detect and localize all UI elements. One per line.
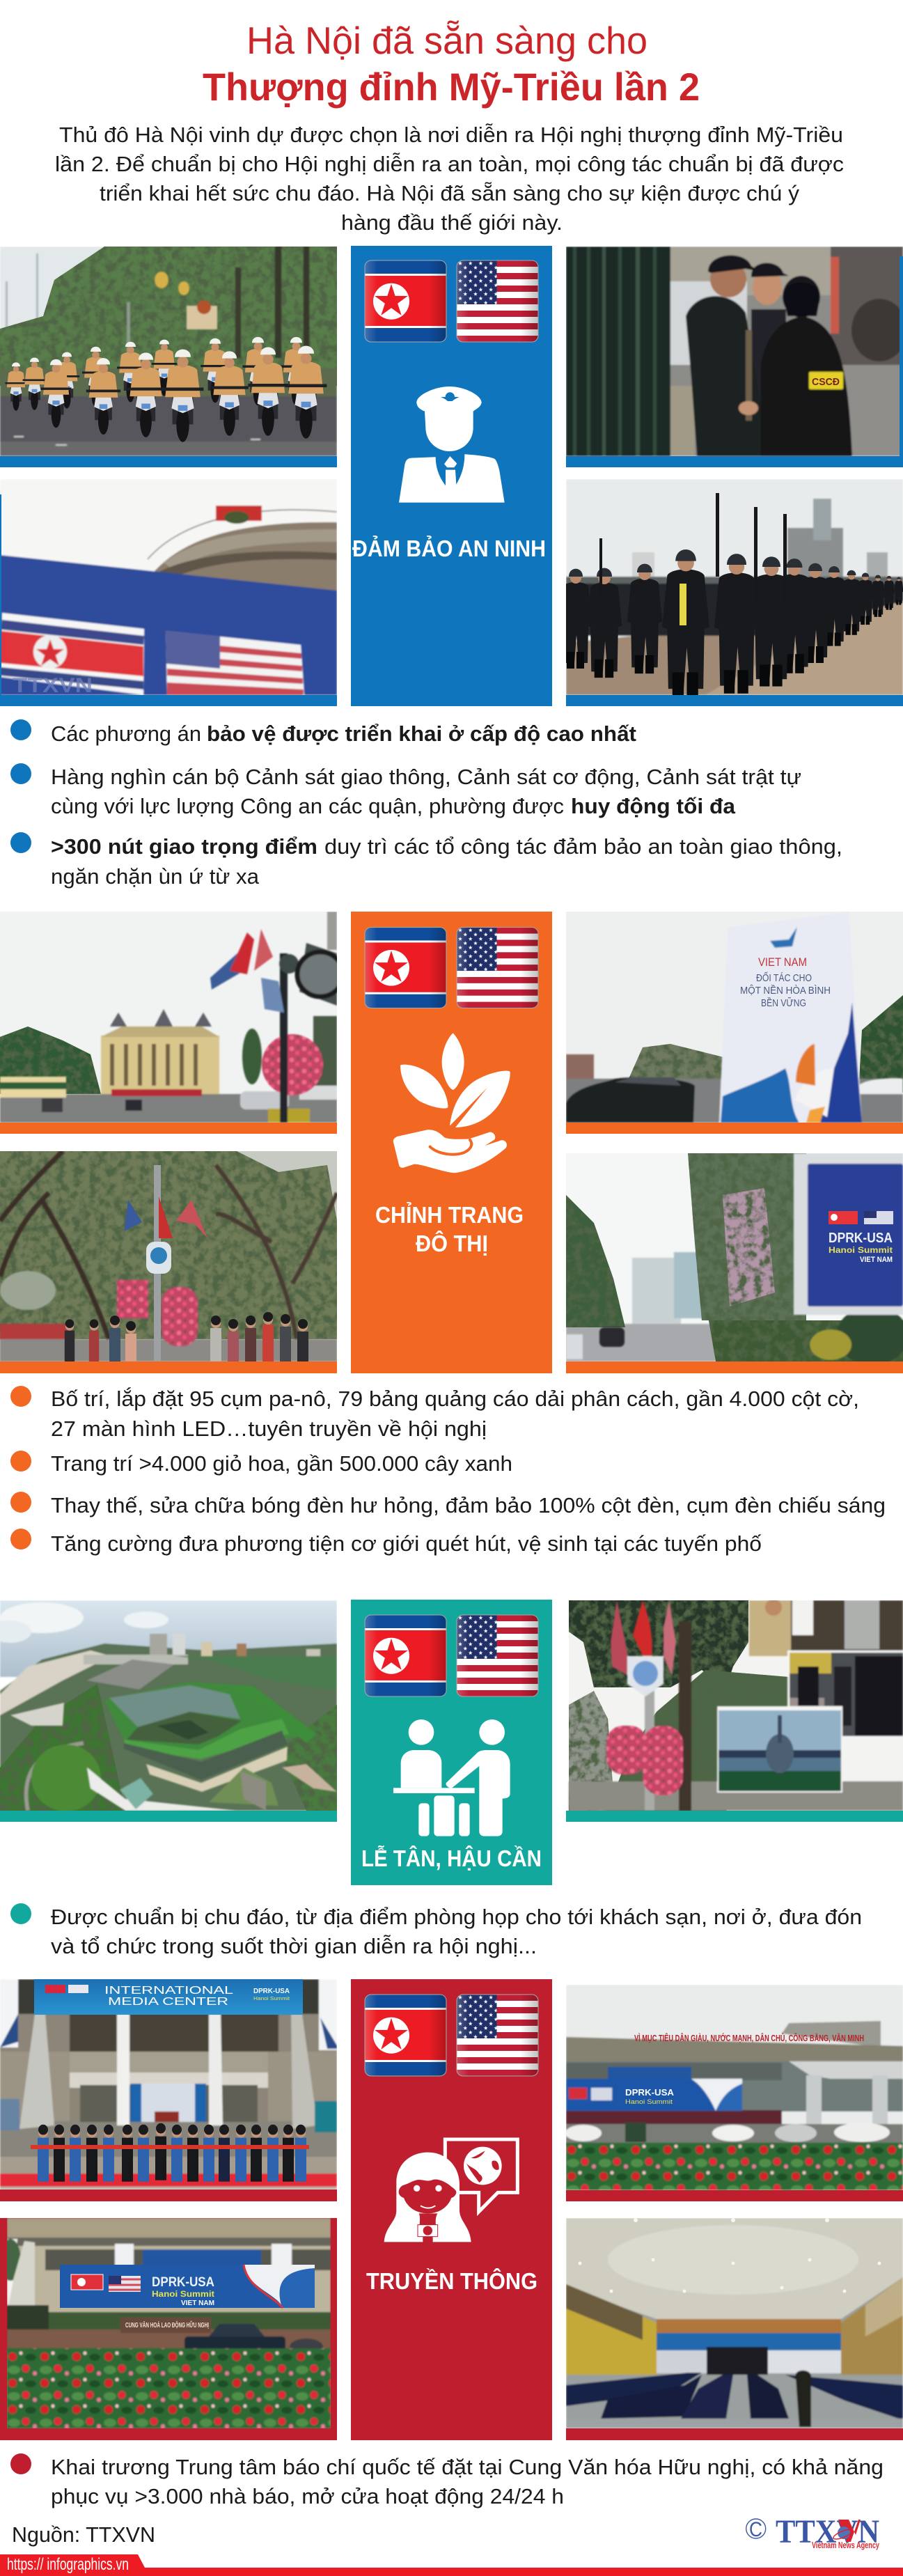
label: urban: [375, 1202, 524, 1256]
title: Hà Nội đã sẵn sàng cho: [246, 19, 647, 62]
bullet list: security: [10, 719, 842, 889]
photo: partnership sign: [566, 912, 903, 1134]
photo: ribbon cutting: Hanoi Summit: [253, 1997, 290, 2001]
photo: banner and flower bed: DPRK-USA: [152, 2275, 214, 2290]
bullet: security 2: Hàng nghìn cán bộ Cảnh sát giao thông, Cảnh sát cơ động, Cảnh sát trật tự: [51, 765, 801, 789]
bullet: security 2: huy động tối đa: [571, 794, 736, 818]
photo: partnership sign: MỘT NỀN HÒA BÌNH: [740, 985, 831, 997]
photo: banner and flower bed: [0, 2218, 337, 2440]
flag: United States: [457, 1995, 538, 2076]
bullet: urban 1: [10, 1386, 859, 1441]
photo: banner and flower bed: CUNG VĂN HOÁ LAO ĐỘNG HỮU NGHỊ: [125, 2320, 209, 2329]
panel: reception and logistics: [0, 1599, 903, 1885]
label: urban: ĐÔ THỊ: [416, 1230, 488, 1256]
photo: partnership sign: ĐỐI TÁC CHO: [756, 971, 812, 984]
intro text block: lần 2. Để chuẩn bị cho Hội nghị diễn ra an toàn, mọi công tác chuẩn bị đã được: [55, 152, 844, 176]
photo: flags on hoarding: [0, 479, 337, 706]
bullet list: media: [10, 2453, 884, 2508]
panel: security: [0, 246, 903, 706]
bullet: security 2: cùng với lực lượng Công an các quận, phường được: [51, 794, 564, 818]
photo: press hall interior: [566, 2218, 903, 2440]
photo: street with billboard: VIET NAM: [860, 1256, 893, 1264]
photo: Friendship Palace exterior: [565, 1985, 903, 2201]
photo: motorcade: [0, 247, 337, 467]
bullet: security 1: Các phương án: [51, 721, 201, 746]
footer bar: [0, 2554, 903, 2576]
centre column: media: [351, 1979, 552, 2440]
icon: hand with plant: [393, 1033, 510, 1173]
bullet: security 3: >300 nút giao trọng điểm: [51, 834, 317, 859]
photo: collage flags, press, aircraft: [566, 1599, 903, 1822]
photo: flags on hoarding: TTXVN: [13, 674, 93, 697]
photo: ribbon cutting: DPRK-USA: [253, 1988, 290, 1995]
bullet: urban 1: Bố trí, lắp đặt 95 cụm pa-nô, 79 bảng quảng cáo dải phân cách, gần 4.000 cột cờ,: [51, 1387, 859, 1411]
bullet: security 2: [10, 763, 801, 818]
bullet: security 1: [10, 719, 636, 746]
bullet: media 1: [10, 2453, 884, 2508]
icon: police officer: [399, 387, 505, 503]
bullet: security 3: duy trì các tổ công tác đảm bảo an toàn giao thông,: [324, 834, 842, 859]
photo: park with flags: [0, 1151, 337, 1375]
bullet list: logistics: [10, 1903, 862, 1958]
centre column: logistics: [351, 1600, 552, 1885]
photo: street with billboard: Hanoi Summit: [829, 1245, 893, 1255]
panel: urban beautification: [0, 912, 903, 1375]
photo: banner and flower bed: Hanoi Summit: [152, 2289, 214, 2299]
photo: ribbon cutting: INTERNATIONAL: [104, 1985, 233, 1997]
bullet: security 3: ngăn chặn ùn ứ từ xa: [51, 864, 260, 889]
intro text block: hàng đầu thế giới này.: [341, 210, 563, 235]
photo: partnership sign: BỀN VỮNG: [761, 997, 806, 1009]
centre column: urban: [351, 912, 552, 1373]
photo: street with billboard: DPRK-USA: [829, 1231, 893, 1246]
photo: convention centre aerial: [0, 1600, 337, 1822]
icon: reporter: [384, 2139, 517, 2242]
panel: media: [0, 1979, 903, 2440]
bullet: urban 4: Tăng cường đưa phương tiện cơ giới quét hút, vệ sinh tại các tuyến phố: [51, 1531, 762, 1556]
footer bar: https:// infographics.vn: [7, 2555, 129, 2574]
bullet: media 1: Khai trương Trung tâm báo chí quốc tế đặt tại Cung Văn hóa Hữu nghị, có khả năng: [51, 2455, 884, 2479]
photo: ribbon cutting: [0, 1979, 337, 2201]
photo: opera house: [0, 912, 343, 1134]
logo: TTXVN: TTXVN: [776, 2513, 879, 2550]
bullet: security 3: [10, 832, 842, 889]
photo: Friendship Palace exterior: Hanoi Summit: [625, 2098, 673, 2105]
title: [203, 19, 700, 109]
flag: North Korea: [365, 1995, 446, 2076]
icon: reception desk: [393, 1719, 510, 1836]
intro text block: Thủ đô Hà Nội vinh dự được chọn là nơi diễn ra Hội nghị thượng đỉnh Mỹ-Triều: [59, 123, 843, 147]
bullet: urban 2: Trang trí >4.000 giỏ hoa, gần 500.000 cây xanh: [51, 1451, 512, 1476]
label: urban: CHỈNH TRANG: [375, 1202, 524, 1228]
bullet list: urban: [10, 1386, 886, 1556]
flag: North Korea: [365, 1615, 446, 1696]
intro text block: triển khai hết sức chu đáo. Hà Nội đã sẵn sàng cho sự kiện được chú ý: [100, 181, 800, 205]
photo: riot police officers: CSCĐ: [812, 376, 840, 388]
photo: street with billboard: [566, 1153, 903, 1373]
bullet: media 1: phục vụ >3.000 nhà báo, mở cửa hoạt động 24/24 h: [51, 2484, 564, 2508]
flag: United States: [457, 1615, 538, 1696]
bullet: logistics 1: Được chuẩn bị chu đáo, từ địa điểm phòng họp cho tới khách sạn, nơi ở, đưa đón: [51, 1905, 862, 1929]
bullet: logistics 1: và tổ chức trong suốt thời gian diễn ra hội nghị...: [51, 1934, 537, 1958]
bullet: security 1: bảo vệ được triển khai ở cấp độ cao nhất: [207, 721, 636, 746]
label: security: ĐẢM BẢO AN NINH: [352, 536, 546, 561]
photo: riot police officers: [566, 247, 903, 467]
logo: TTXVN: C: [749, 2518, 762, 2541]
label: logistics: LỄ TÂN, HẬU CẦN: [361, 1845, 542, 1871]
photo: police line: [560, 479, 903, 706]
photo: partnership sign: VIET NAM: [758, 955, 807, 969]
photo: banner and flower bed: VIET NAM: [181, 2300, 214, 2307]
title: Thượng đỉnh Mỹ-Triều lần 2: [203, 65, 700, 109]
flag: North Korea: [365, 260, 446, 342]
bullet: urban 3: Thay thế, sửa chữa bóng đèn hư hỏng, đảm bảo 100% cột đèn, cụm đèn chiếu sáng: [51, 1493, 886, 1517]
photo: Friendship Palace exterior: DPRK-USA: [625, 2087, 675, 2098]
flag: North Korea: [365, 928, 446, 1008]
centre column: security: [351, 246, 552, 706]
bullet: logistics 1: [10, 1903, 862, 1958]
bullet: urban 1: 27 màn hình LED…tuyên truyền về hội nghị: [51, 1416, 487, 1441]
source credit: Nguồn: TTXVN: [12, 2522, 155, 2547]
intro text block: [55, 123, 844, 235]
photo: ribbon cutting: MEDIA CENTER: [108, 1996, 228, 2008]
flag: United States: [457, 260, 538, 342]
label: media: TRUYỀN THÔNG: [366, 2267, 537, 2294]
flag: United States: [457, 928, 538, 1008]
